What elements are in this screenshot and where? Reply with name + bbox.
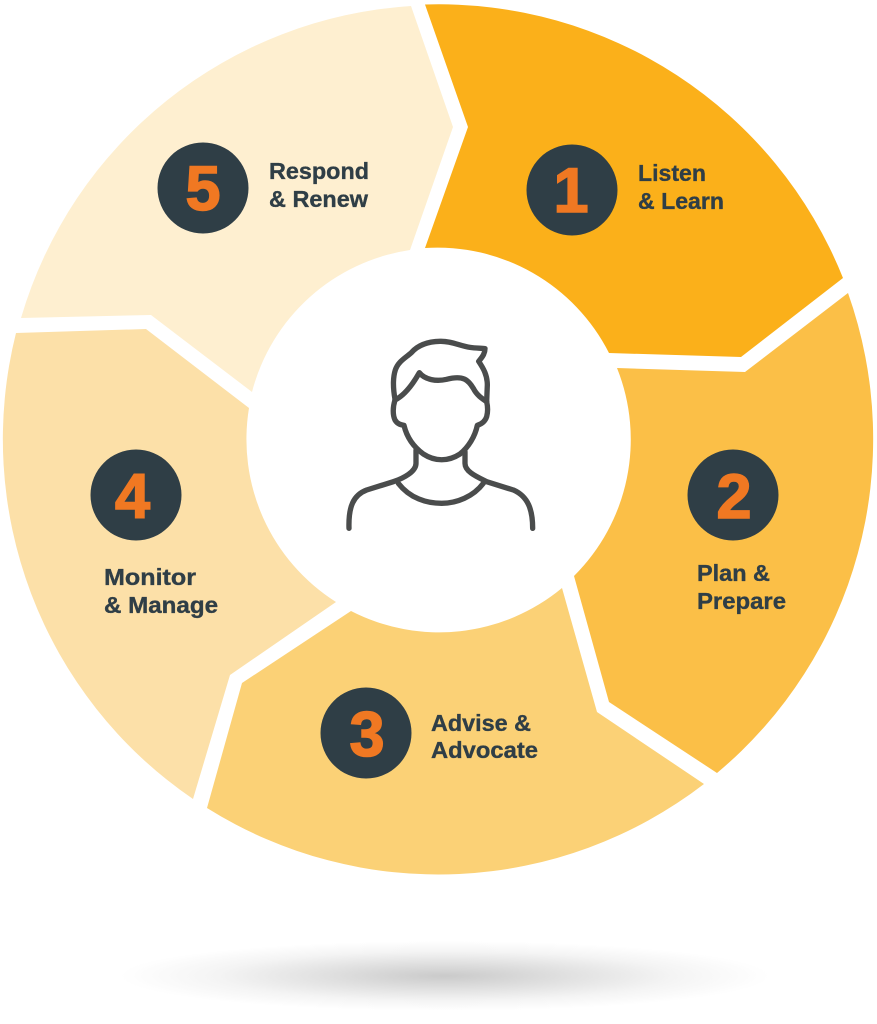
icon: person [349,341,533,528]
number badge 2: 2 [716,462,752,532]
number badge 1 [526,144,618,236]
wedge 3 [207,588,704,874]
label: Listen & Learn: & Learn [638,188,724,214]
segment 4: Monitor & Manage [3,329,336,799]
wedge 2 [574,293,873,773]
number badge 1: 1 [553,156,589,226]
label: Monitor & Manage: Monitor [104,564,196,590]
label: Advise & Advocate: Advocate [431,737,538,763]
ground shadow [120,941,770,1011]
wedge 4 [3,329,336,799]
label: Respond & Renew: & Renew [269,186,368,212]
number badge 5 [158,142,248,234]
number badge 5: 5 [185,154,221,224]
number badge 4: 4 [115,462,150,532]
segment 1: Listen & Learn [425,4,843,357]
label: Advise & Advocate [431,710,538,763]
number badge 3 [320,688,412,778]
label: Plan & Prepare [697,560,786,614]
number badge 2 [688,450,778,540]
label: Listen & Learn [638,160,724,214]
label: Plan & Prepare: Plan & [697,560,770,586]
label: Listen & Learn: Listen [638,160,706,186]
label: Respond & Renew [269,158,369,212]
label: Monitor & Manage: & Manage [104,592,218,618]
number badge 4 [90,450,182,540]
segment 2: Plan & Prepare [574,293,873,773]
label: Advise & Advocate: Advise & [431,710,531,736]
label: Plan & Prepare: Prepare [697,588,786,614]
label: Monitor & Manage [104,564,218,618]
wedge 5 [21,6,453,392]
number badge 3: 3 [349,700,385,770]
segment 5: Respond & Renew [21,6,453,392]
label: Respond & Renew: Respond [269,158,369,184]
segment 3: Advise & Advocate [207,588,704,874]
wedge 1 [425,4,843,357]
